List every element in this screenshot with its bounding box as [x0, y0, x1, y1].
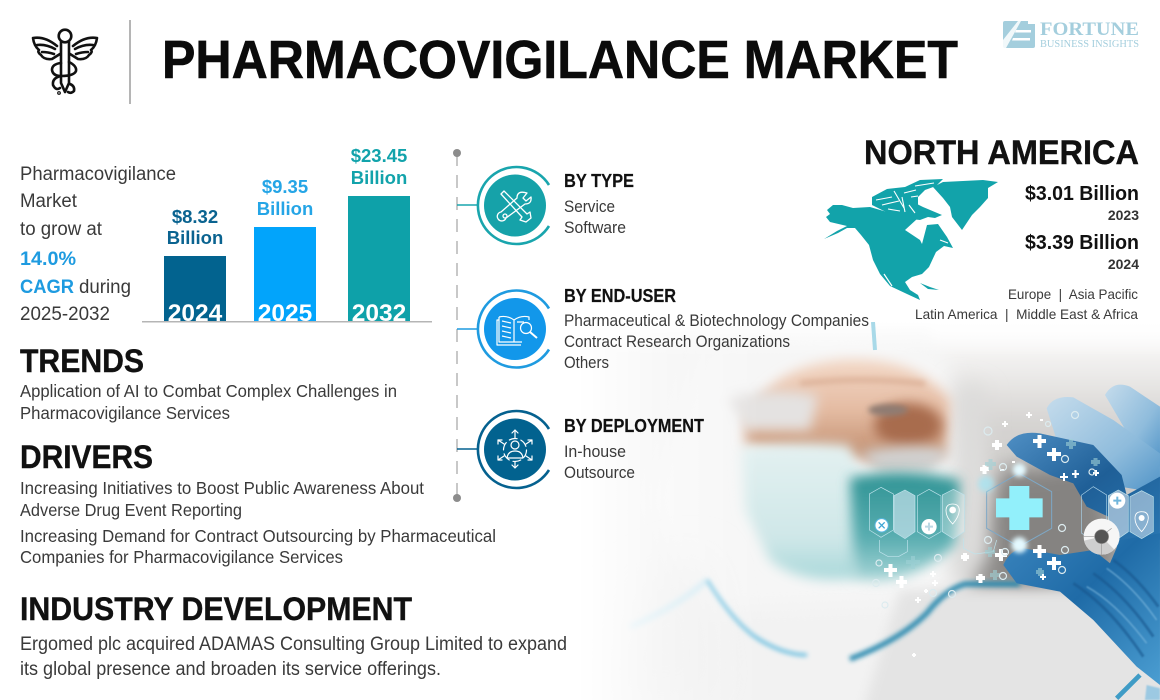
photo: scientist holding digital medical icons [629, 322, 1160, 700]
trends section: Application of AI to Combat Complex Challenges in [20, 381, 397, 401]
by end-user text: Others [564, 354, 609, 372]
bar 2024: $8.32 [172, 206, 218, 227]
by type text: Service [564, 198, 615, 216]
greenland [933, 180, 998, 230]
bar 2025 [254, 176, 316, 327]
bar 2024: Billion [167, 227, 223, 248]
by type text [564, 171, 634, 237]
suit hood and shoulders [600, 330, 1160, 700]
drivers section: Increasing Initiatives to Boost Public Awareness About [20, 478, 424, 498]
index finger [1047, 397, 1160, 493]
icon: person with arrows, by deployment [457, 411, 549, 488]
trends section [20, 343, 397, 423]
industry development section [20, 591, 567, 680]
trends section: TRENDS [20, 343, 144, 379]
suit collar piping [630, 580, 1020, 659]
regional figures: 2023 [1108, 207, 1139, 223]
bar 2024: 2024 [168, 300, 223, 327]
industry development section: INDUSTRY DEVELOPMENT [20, 591, 412, 627]
top edge fade [683, 322, 932, 332]
growth summary text: during [79, 277, 131, 298]
donut chart [1083, 524, 1114, 555]
second finger [1105, 384, 1160, 454]
logo: Fortune Business Insights: BUSINESS INSIGHTS [1040, 39, 1139, 50]
growth summary text: to grow at [20, 219, 103, 240]
by end-user text: Contract Research Organizations [564, 333, 790, 351]
drivers section: Increasing Demand for Contract Outsourcing by Pharmaceutical [20, 526, 496, 546]
bar 2032: 2032 [352, 300, 406, 327]
header icon: caduceus [33, 30, 97, 94]
index fingertip [1007, 433, 1160, 547]
other regions: Latin America | Middle East & Africa [915, 306, 1138, 322]
logo: Fortune Business Insights: FORTUNE [1040, 19, 1139, 40]
bar 2032: $23.45 [351, 145, 407, 166]
regional heading: NORTH AMERICA [864, 134, 1139, 172]
drivers section: Companies for Pharmacovigilance Services [20, 547, 343, 567]
drivers section [20, 439, 496, 567]
regional figures: 2024 [1108, 256, 1139, 272]
icon: tools, by type [457, 167, 549, 244]
floating medical crosses [884, 412, 1100, 657]
header divider [129, 20, 131, 104]
other regions: Europe | Asia Pacific [1008, 286, 1138, 302]
industry development section: its global presence and broaden its service offerings. [20, 659, 441, 680]
segmentation timeline [453, 149, 461, 502]
drivers section: Adverse Drug Event Reporting [20, 500, 242, 520]
by deployment text: In-house [564, 443, 626, 461]
by type text: Software [564, 219, 626, 237]
glove hand [1003, 385, 1160, 700]
growth summary text: Pharmacovigilance [20, 164, 176, 185]
growth summary text: Market [20, 191, 78, 212]
arctic islands [872, 179, 943, 219]
mainland [824, 205, 953, 300]
regional figures [1025, 183, 1139, 272]
baffin island and caribbean [911, 202, 942, 220]
icon: book with magnifier, by end-user [457, 290, 549, 368]
by end-user text: Pharmaceutical & Biotechnology Companies [564, 312, 869, 330]
growth summary text: CAGR [20, 277, 74, 298]
by end-user text [564, 286, 869, 372]
bar 2024 [164, 206, 226, 327]
logo: Fortune Business Insights [1003, 19, 1139, 50]
growth summary text: 2025-2032 [20, 304, 110, 325]
by end-user text: BY END-USER [564, 286, 676, 306]
bar 2025: Billion [257, 198, 313, 219]
regional figures: $3.39 Billion [1025, 232, 1139, 254]
face mask [740, 443, 960, 581]
regional figures: $3.01 Billion [1025, 183, 1139, 205]
goggles [728, 391, 950, 472]
photo background [958, 372, 1160, 597]
digital hexagon icons and medical cross [869, 463, 1153, 557]
industry development section: Ergomed plc acquired ADAMAS Consulting Group Limited to expand [20, 634, 567, 655]
by type text: BY TYPE [564, 171, 634, 191]
by deployment text: Outsource [564, 464, 635, 482]
title: PHARMACOVIGILANCE MARKET [162, 30, 958, 90]
face [745, 360, 950, 462]
growth summary text: 14.0% [20, 249, 76, 270]
bar 2032 [348, 145, 410, 327]
map: north america [824, 179, 998, 300]
bar 2025: $9.35 [262, 176, 308, 197]
by deployment text: BY DEPLOYMENT [564, 416, 704, 436]
other regions [915, 286, 1138, 322]
trends section: Pharmacovigilance Services [20, 403, 230, 423]
drivers section: DRIVERS [20, 439, 153, 475]
bar 2025: 2025 [258, 300, 312, 327]
bar chart: market size [142, 145, 432, 327]
by deployment text [564, 416, 704, 482]
main cross hexagon [978, 463, 1052, 553]
growth summary text [20, 164, 176, 325]
bar 2032: Billion [351, 167, 407, 188]
thumb and palm [1003, 533, 1160, 685]
